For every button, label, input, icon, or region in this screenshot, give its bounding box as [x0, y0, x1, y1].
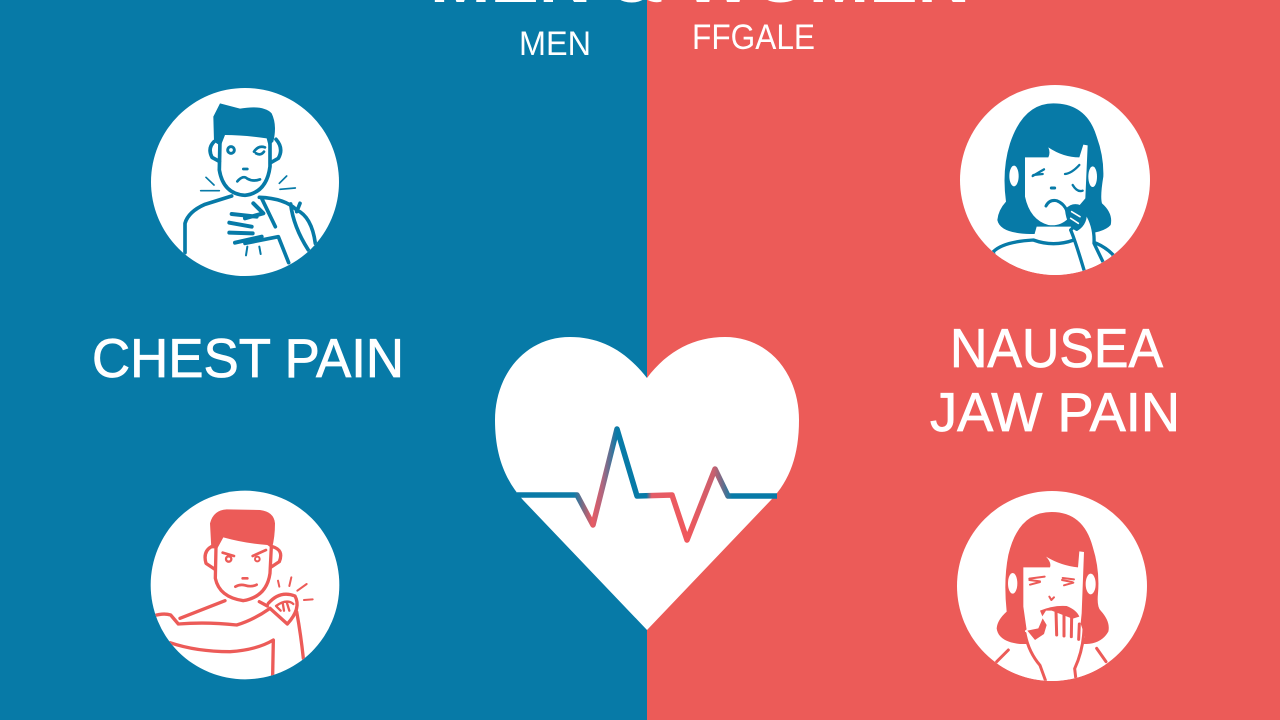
heading: men: MEN — [519, 25, 591, 63]
heading: women: FFGALE — [692, 18, 815, 57]
label: nausea and jaw pain: JAW PAIN — [930, 381, 1180, 443]
label: nausea and jaw pain: NAUSEA — [950, 317, 1163, 379]
icon: woman covering her mouth — [957, 491, 1147, 693]
icon: woman with nausea — [960, 85, 1150, 283]
icon: man with chest pain — [151, 88, 339, 276]
panel: men background — [0, 0, 647, 720]
icon: man with shoulder and arm pain — [151, 491, 339, 679]
label: chest pain: CHEST PAIN — [92, 327, 404, 389]
icon: central heart with ECG line — [495, 337, 799, 630]
panel: women background — [647, 0, 1280, 720]
label: nausea and jaw pain — [930, 317, 1180, 443]
